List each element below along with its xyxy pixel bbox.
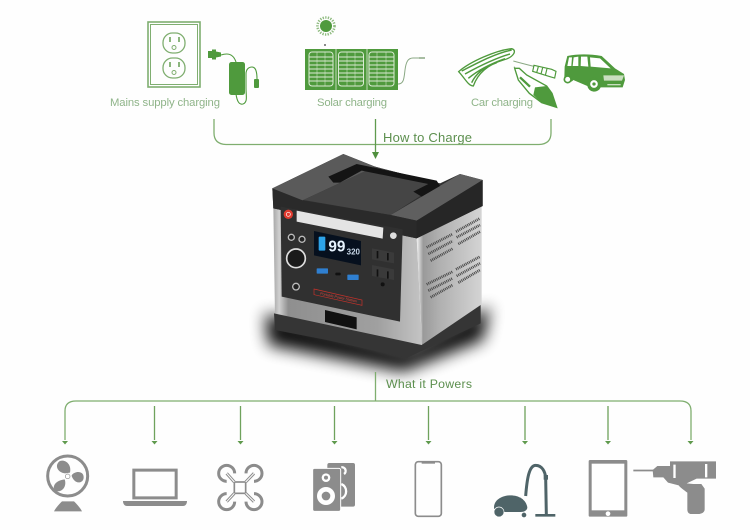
connector: powers bus xyxy=(65,372,691,440)
icon: power adapter xyxy=(208,50,259,104)
display: 320 xyxy=(347,247,361,256)
icon: tablet xyxy=(589,460,627,517)
icon: vacuum cleaner xyxy=(494,465,555,517)
icon: wall outlet xyxy=(148,22,200,87)
silver casing xyxy=(273,205,482,350)
brand label xyxy=(314,289,362,305)
handle slot xyxy=(325,310,357,329)
display: 99 xyxy=(328,238,345,255)
icon: solar panels xyxy=(305,49,425,90)
main dial xyxy=(287,249,305,268)
power station product xyxy=(265,154,490,372)
connector: charge bracket xyxy=(214,119,551,144)
brand label: Portable Power Station xyxy=(320,292,357,303)
icon: drone xyxy=(219,465,262,510)
icon: fan xyxy=(48,456,88,511)
USB ports xyxy=(317,268,359,280)
base band xyxy=(274,305,481,358)
shadow xyxy=(265,307,490,372)
vents xyxy=(427,218,480,297)
icon: speakers xyxy=(313,463,355,511)
label strip xyxy=(297,211,383,239)
icon: sun xyxy=(318,18,334,46)
small dials xyxy=(288,234,305,290)
display xyxy=(314,231,361,265)
handle xyxy=(328,164,440,197)
top cap xyxy=(272,154,483,238)
light button xyxy=(390,232,397,239)
panel: how to charge xyxy=(110,18,625,159)
icon: power drill xyxy=(633,461,716,514)
AC sockets xyxy=(372,248,394,286)
how to charge heading: How to Charge xyxy=(383,130,472,145)
what it powers heading: What it Powers xyxy=(386,377,472,391)
power button xyxy=(284,210,293,219)
arrow: down to power station xyxy=(372,119,379,159)
front panel xyxy=(281,207,403,322)
mains label: Mains supply charging xyxy=(110,97,220,109)
icon: laptop xyxy=(123,469,187,506)
icon: smartphone xyxy=(415,462,441,516)
icon: car charger cable xyxy=(459,49,557,107)
panel: what it powers xyxy=(48,372,716,517)
icon: car xyxy=(564,54,625,92)
arrows: to devices xyxy=(62,406,694,444)
solar label: Solar charging xyxy=(317,97,387,109)
car label: Car charging xyxy=(471,97,533,109)
